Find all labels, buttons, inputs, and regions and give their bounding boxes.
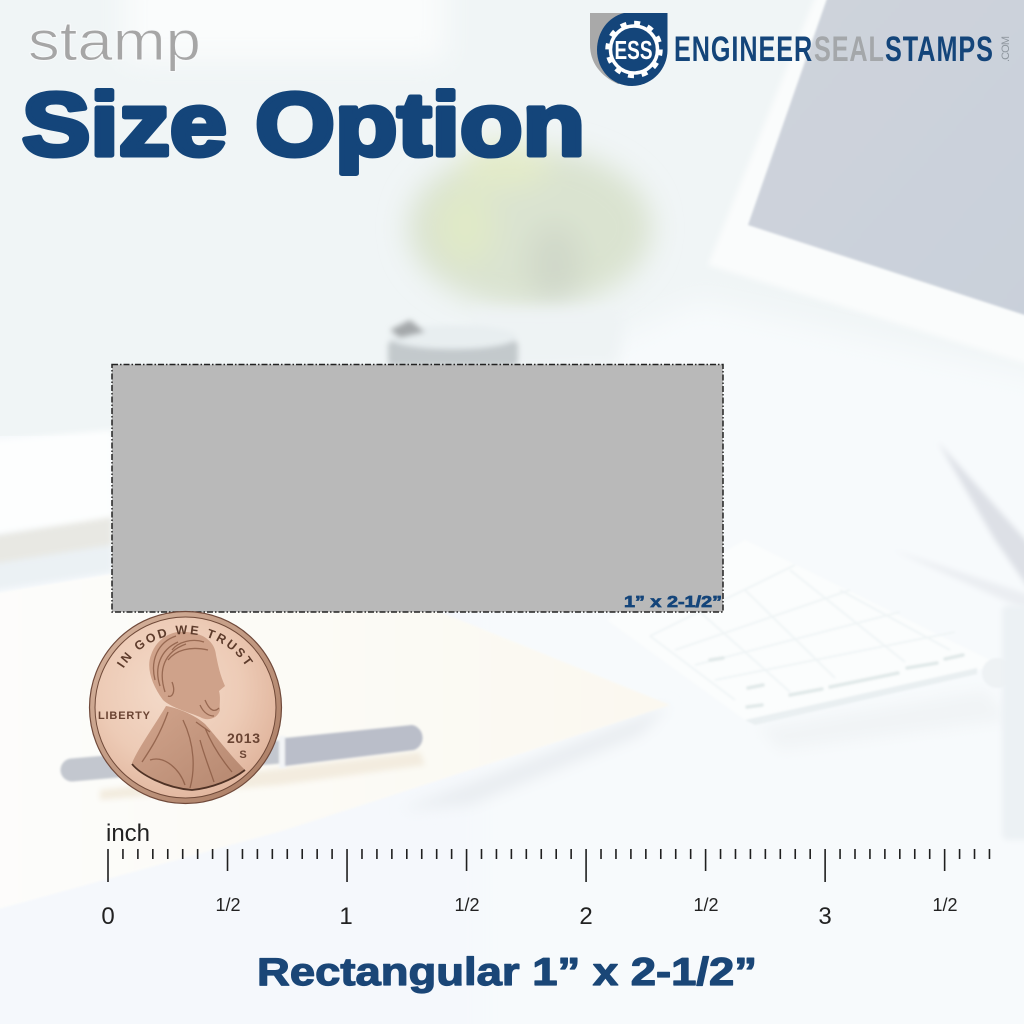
- background: wall: [0, 0, 1024, 436]
- logo: gear teeth: [608, 23, 660, 76]
- background: keyboard shadow: [760, 690, 1010, 750]
- stamp impression area: [112, 364, 723, 612]
- penny coin: [88, 610, 282, 804]
- background: desk back area: [480, 300, 1024, 1024]
- ruler ticks: [108, 849, 989, 882]
- background: paper sheet: [0, 574, 670, 914]
- ruler unit label: inch: [106, 820, 150, 847]
- ruler number labels: 3: [818, 903, 832, 930]
- ruler number labels: 1: [339, 903, 353, 930]
- coin: mint mark: S: [239, 749, 247, 761]
- logo: grey shield backing: [590, 13, 640, 84]
- ruler half-inch labels: 1/2: [693, 895, 719, 915]
- ruler half-inch labels: 1/2: [215, 895, 241, 915]
- background: coffee cup: [388, 320, 518, 366]
- ruler half-inch labels: [215, 895, 958, 915]
- background: pencils: [893, 442, 1024, 612]
- ruler number labels: 0: [101, 903, 115, 930]
- bottom caption: Rectangular 1” x 2-1/2”: [257, 951, 757, 994]
- logo: gear ring: [610, 26, 658, 73]
- background: plant: [408, 141, 652, 308]
- ruler half-inch labels: 1/2: [454, 895, 480, 915]
- coin field: [95, 617, 276, 798]
- background: window glow: [125, 0, 445, 60]
- coin: hair and coat detail: [142, 636, 232, 788]
- coin: year: 2013: [227, 730, 260, 746]
- logo wordmark: ENGINEER: ENGINEER: [674, 30, 812, 69]
- inch ruler: [101, 820, 989, 930]
- ruler number labels: 2: [579, 903, 593, 930]
- small heading: stamp: stamp: [28, 9, 201, 72]
- background: monitor bezel: [708, 0, 1024, 368]
- coin: LIBERTY: LIBERTY: [98, 710, 151, 722]
- coin rim: [90, 612, 282, 804]
- background: pen: [72, 725, 423, 770]
- coin: bust base shadow: [132, 764, 245, 790]
- coin: Lincoln bust: [132, 706, 245, 790]
- logo: navy badge: [597, 13, 668, 86]
- background: paper shadow: [400, 705, 670, 810]
- background: glass cup: [1002, 605, 1024, 840]
- coin: Lincoln head: [149, 632, 225, 719]
- logo wordmark: .COM: .COM: [1000, 36, 1012, 62]
- ruler half-inch labels: 1/2: [932, 895, 958, 915]
- main heading: Size Option: Size Option: [22, 74, 585, 174]
- coin: motto: IN GOD WE TRUST: [116, 625, 254, 668]
- logo: ESS letters: ESS: [614, 35, 652, 65]
- brand logo: [590, 13, 1012, 86]
- background: monitor screen: [748, 0, 1024, 320]
- background: plant pot: [470, 310, 625, 366]
- stamp size label: 1” x 2-1/2”: [624, 594, 722, 611]
- logo wordmark: SEAL: SEAL: [814, 30, 884, 69]
- background: pen shadow: [100, 752, 425, 800]
- background: left shelf: [0, 430, 112, 592]
- stamp size rectangle: [112, 364, 723, 612]
- ruler number labels: [101, 903, 832, 930]
- logo wordmark: STAMPS: STAMPS: [885, 30, 993, 69]
- background: keyboard: [607, 540, 1012, 725]
